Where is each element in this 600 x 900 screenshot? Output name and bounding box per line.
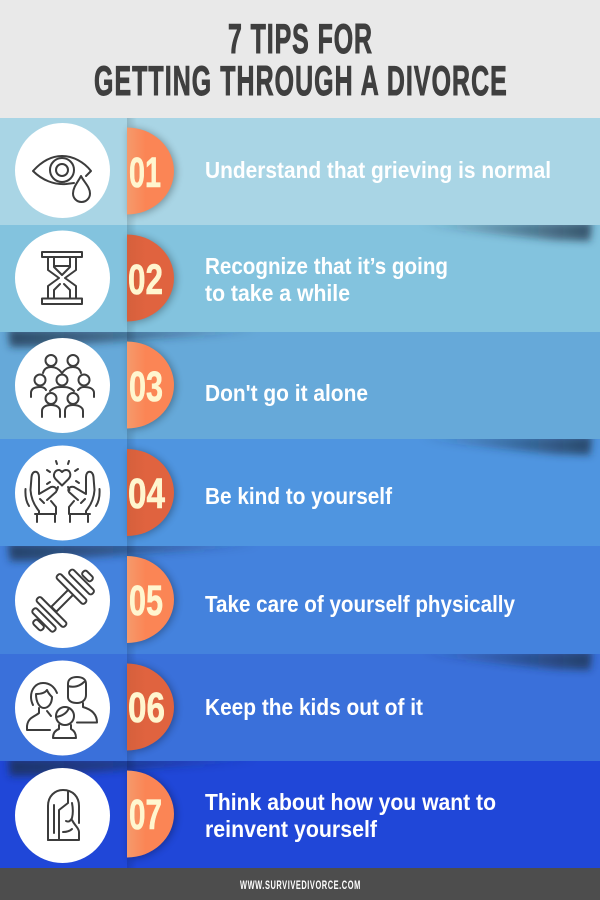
number tab 01 bbox=[127, 128, 176, 216]
tip 5 text: Take care of yourself physically bbox=[205, 591, 515, 617]
number tab 04 bbox=[127, 449, 176, 537]
tip 2 text: to take a while bbox=[205, 280, 350, 306]
top-left cast shadow bbox=[8, 543, 260, 561]
icon: hourglass bbox=[15, 230, 110, 326]
tip 2 text bbox=[205, 253, 448, 306]
title line 2: GETTING THROUGH A DIVORCE bbox=[94, 59, 507, 105]
tip 2 text: Recognize that it’s going bbox=[205, 253, 448, 279]
tip 7 text bbox=[205, 789, 496, 842]
number tab 02: 02 bbox=[128, 256, 163, 304]
number tab 06 bbox=[127, 664, 176, 752]
tip 7 text: Think about how you want to bbox=[205, 789, 496, 815]
tip 6 text: Keep the kids out of it bbox=[205, 694, 423, 720]
number tab 05 bbox=[127, 556, 176, 644]
title banner bbox=[0, 0, 600, 118]
tip 3 panel bbox=[0, 329, 600, 439]
number tab 07: 07 bbox=[129, 791, 162, 839]
tip 5 panel bbox=[0, 543, 600, 654]
top-right cast shadow bbox=[420, 651, 592, 670]
top-left cast shadow bbox=[8, 758, 260, 776]
icon: group of people bbox=[15, 338, 110, 433]
top-right cast shadow bbox=[420, 436, 592, 455]
tip 1 panel bbox=[0, 118, 600, 225]
tip 7 text: reinvent yourself bbox=[205, 816, 377, 842]
tip 1 text: Understand that grieving is normal bbox=[205, 157, 551, 183]
number tab 02 bbox=[127, 234, 176, 322]
icon: family bbox=[15, 660, 110, 756]
title line 1: 7 TIPS FOR bbox=[228, 17, 372, 63]
number tab 03: 03 bbox=[129, 363, 163, 411]
icon: dumbbell bbox=[15, 553, 110, 648]
top-left cast shadow bbox=[8, 329, 260, 347]
icon: crying eye bbox=[15, 123, 110, 218]
tip 4 panel bbox=[0, 436, 600, 546]
tip 2 panel bbox=[0, 222, 600, 332]
website url: WWW.SURVIVEDIVORCE.COM bbox=[240, 879, 360, 893]
icon: hands with heart bbox=[15, 446, 110, 540]
tip 7 panel bbox=[0, 758, 600, 868]
tip 4 text: Be kind to yourself bbox=[205, 483, 392, 509]
top-right cast shadow bbox=[420, 222, 592, 241]
tip 3 text: Don't go it alone bbox=[205, 380, 368, 406]
number tab 07 bbox=[127, 770, 176, 858]
footer bar bbox=[0, 868, 600, 900]
number tab 01: 01 bbox=[129, 149, 161, 197]
number tab 05: 05 bbox=[129, 577, 163, 625]
number tab 04: 04 bbox=[128, 470, 165, 518]
icon: woman bbox=[15, 768, 110, 863]
tip 6 panel bbox=[0, 651, 600, 761]
number tab 03 bbox=[127, 342, 176, 430]
number tab 06: 06 bbox=[128, 684, 165, 732]
